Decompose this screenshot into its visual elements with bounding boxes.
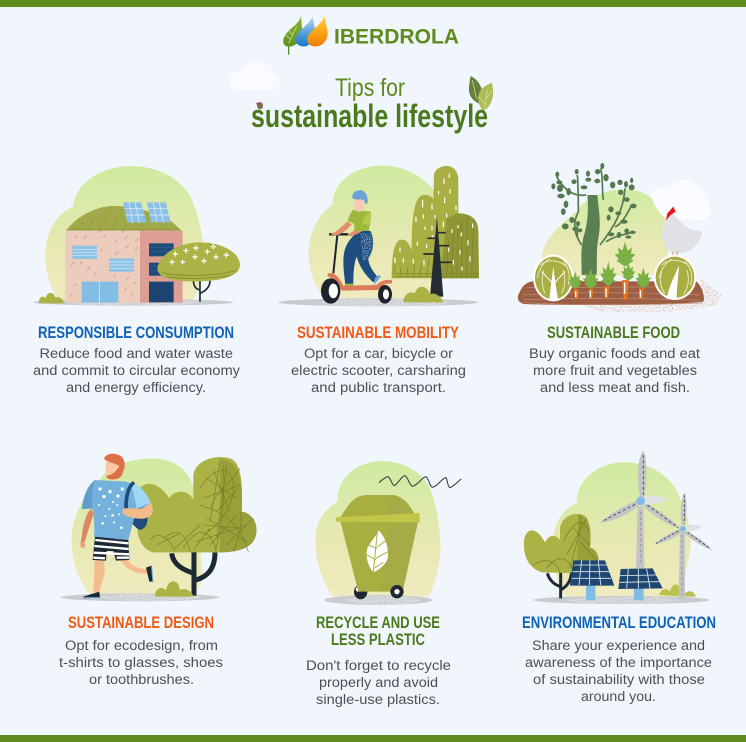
body text: or toothbrushes. (89, 672, 194, 687)
illustration: person on electric scooter (278, 166, 479, 306)
body text: around you. (581, 689, 656, 704)
body text: Reduce food and water waste (40, 346, 233, 361)
illustration: recycling bin (315, 461, 461, 605)
body text: electric scooter, carsharing (291, 363, 466, 378)
panel: recycle and use less plastic (306, 461, 461, 707)
illustration: house with solar panels and tree (33, 166, 240, 306)
body text (59, 638, 223, 687)
illustration: walking man with backpack and tree (61, 454, 257, 601)
body text: properly and avoid (319, 675, 438, 690)
body text: Opt for a car, bicycle or (304, 346, 454, 361)
top bar (0, 0, 746, 7)
body text: and energy efficiency. (66, 380, 206, 395)
heading: RECYCLE AND USE (316, 613, 440, 632)
body text: more fruit and vegetables (533, 363, 697, 378)
heading: SUSTAINABLE DESIGN (68, 613, 214, 632)
panel: sustainable design (59, 454, 257, 687)
body text: and commit to circular economy (33, 363, 240, 378)
body text: Buy organic foods and eat (529, 346, 700, 361)
body text (33, 346, 240, 395)
icon: leaf and drops (283, 15, 328, 55)
panel: sustainable food (518, 163, 722, 395)
body text (306, 658, 451, 707)
heading (316, 613, 440, 649)
panel: environmental education (522, 451, 716, 704)
heading: SUSTAINABLE FOOD (547, 323, 680, 342)
body text (525, 638, 712, 704)
body text: Don't forget to recycle (306, 658, 451, 673)
body text: Opt for ecodesign, from (65, 638, 218, 653)
title line 1: Tips for (335, 74, 405, 102)
body text: single-use plastics. (316, 692, 440, 707)
heading: LESS PLASTIC (331, 630, 425, 649)
title line 2: sustainable lifestyle (251, 98, 488, 134)
title (251, 74, 488, 134)
body text: awareness of the importance (525, 655, 712, 670)
logo wordmark: IBERDROLA (334, 26, 459, 48)
body text: and less meat and fish. (540, 380, 690, 395)
body text: t-shirts to glasses, shoes (59, 655, 223, 670)
decoration: title cloud (229, 61, 280, 90)
body text: and public transport. (311, 380, 446, 395)
icon: leaves (469, 76, 493, 111)
panel: responsible consumption (33, 166, 240, 395)
icon: bird (256, 102, 263, 109)
bottom bar (0, 735, 746, 742)
body text (529, 346, 700, 395)
body text: of sustainability with those (533, 672, 705, 687)
heading: RESPONSIBLE CONSUMPTION (38, 323, 234, 342)
logo: Iberdrola (283, 15, 459, 55)
illustration: wind turbines and solar panels (524, 451, 712, 604)
panel: sustainable mobility (278, 166, 479, 395)
illustration: vegetable garden with hen (518, 163, 722, 312)
heading: SUSTAINABLE MOBILITY (297, 323, 460, 342)
body text (291, 346, 466, 395)
body text: Share your experience and (532, 638, 705, 653)
